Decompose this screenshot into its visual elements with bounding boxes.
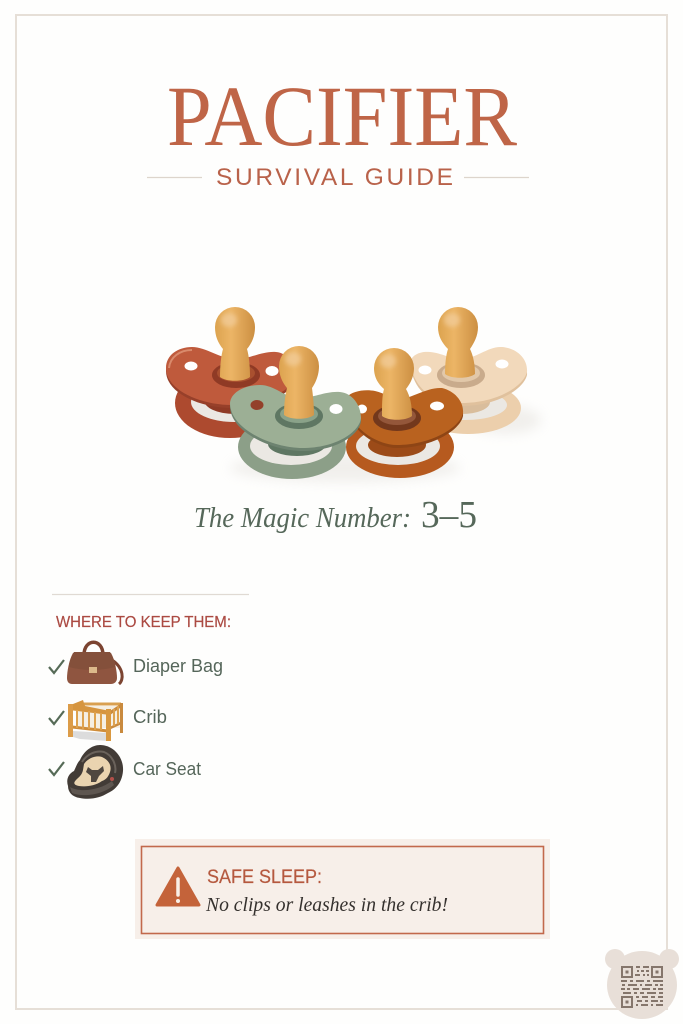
subtitle with rules: SURVIVAL GUIDE	[216, 164, 453, 191]
list item: crib	[49, 700, 167, 741]
list item: diaper bag	[49, 642, 223, 684]
magic number: The Magic Number:	[194, 502, 411, 534]
magic number: 3–5	[421, 494, 477, 536]
icon: crib	[68, 700, 123, 741]
list item: car seat	[49, 745, 201, 799]
pacifier: sage	[230, 346, 361, 479]
section heading: where to keep them: WHERE TO KEEP THEM:	[56, 614, 231, 631]
QR code	[621, 967, 663, 1007]
pacifier: terracotta	[166, 307, 295, 438]
check mark	[49, 711, 64, 724]
callout text: No clips or leashes in the crib!	[205, 894, 448, 916]
label: Car Seat	[133, 759, 201, 779]
callout heading: SAFE SLEEP:	[207, 866, 322, 888]
icon: warning triangle	[157, 868, 199, 905]
pacifier: cream	[410, 307, 527, 434]
magic number	[194, 494, 477, 536]
label: Diaper Bag	[133, 656, 223, 676]
check mark	[49, 660, 64, 673]
illustration: four pacifiers	[166, 307, 541, 482]
icon: diaper bag	[67, 642, 122, 684]
callout: safe sleep	[135, 839, 550, 939]
label: Crib	[133, 707, 167, 727]
pacifier: rust	[346, 348, 463, 478]
bear QR badge	[605, 949, 679, 1019]
title: PACIFIER	[167, 68, 518, 164]
icon: car seat	[67, 745, 123, 799]
check mark	[49, 762, 64, 775]
